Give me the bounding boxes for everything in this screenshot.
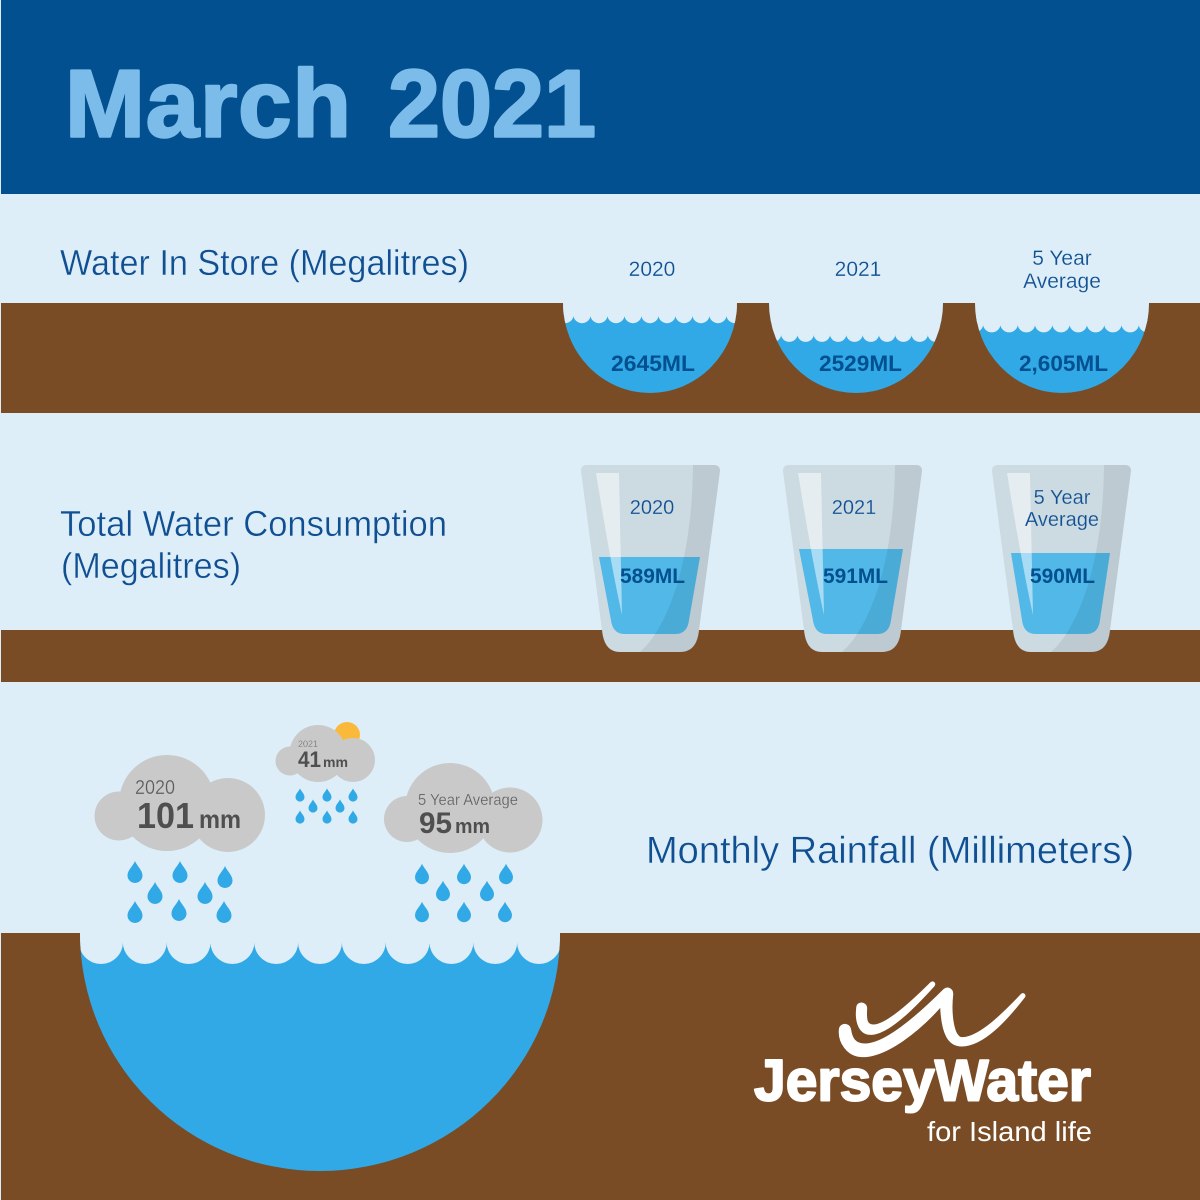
cloud 2021: 41 (298, 747, 321, 772)
heading: total water consumption: (Megalitres) (61, 545, 241, 586)
cloud 2020: 101 (137, 795, 194, 836)
panel: monthly rainfall (0, 722, 1200, 1200)
glass 2021 (783, 465, 922, 652)
rain drops 2021 (296, 788, 358, 824)
cloud 5 year average: 5 Year Average (418, 792, 518, 809)
cloud 2021 (276, 725, 375, 782)
cloud 2021: mm (323, 754, 348, 770)
page edge (0, 0, 1, 1200)
heading: water in store: Water In Store (Megalitres) (60, 242, 469, 283)
reservoir 2020 (556, 258, 744, 393)
reservoir 2021: 2021 (835, 258, 881, 281)
reservoir 2020: 2645ML (611, 351, 695, 376)
glass 5 year average (992, 465, 1131, 652)
glass 2021: 591ML (823, 565, 888, 588)
cloud 2020: mm (199, 806, 241, 834)
cloud 2020: 2020 (135, 777, 175, 799)
cloud 5 year average (384, 763, 542, 853)
glass 2021: 2021 (832, 497, 876, 519)
heading: monthly rainfall: Monthly Rainfall (Millimeters) (646, 830, 1134, 872)
icon: sun (334, 722, 360, 748)
glass 2020 (581, 465, 720, 652)
glass 5 year average: 590ML (1030, 565, 1095, 588)
tagline: for Island life (927, 1116, 1092, 1147)
logo: Jersey Water (754, 982, 1092, 1147)
reservoir 2021 (765, 258, 945, 393)
heading: total water consumption (60, 503, 447, 586)
shelf (0, 630, 1200, 682)
reservoir 5 year average: Average (1023, 270, 1101, 293)
glass 2020: 2020 (630, 497, 674, 519)
panel: total water consumption (0, 465, 1200, 682)
glass 2020: 589ML (620, 565, 685, 588)
large reservoir (78, 920, 562, 1171)
title (65, 50, 596, 158)
glass 5 year average: 5 Year (1034, 487, 1091, 509)
cloud 2021: 2021 (298, 739, 318, 750)
reservoir 5 year average (975, 250, 1149, 393)
reservoir 5 year average: 5 Year (1032, 247, 1092, 270)
header banner (0, 0, 1200, 194)
cloud 2020 (94, 755, 265, 852)
cloud 5 year average: 95 (419, 807, 452, 840)
cloud 5 year average: mm (455, 816, 490, 838)
rain drops 2020 (128, 861, 232, 923)
wordmark: JerseyWater (754, 1048, 1091, 1114)
ground strip (0, 303, 1200, 413)
title: March (65, 50, 351, 158)
title: 2021 (388, 50, 596, 158)
reservoir 2021: 2529ML (819, 351, 902, 376)
icon: waves (839, 982, 1025, 1057)
panel: water in store (0, 242, 1200, 413)
rain drops 5 year average (415, 864, 513, 922)
ground (0, 933, 1200, 1200)
heading: total water consumption: Total Water Consumption (60, 503, 447, 544)
reservoir 5 year average: 2,605ML (1019, 351, 1108, 376)
reservoir 2020: 2020 (629, 258, 675, 281)
glass 5 year average: Average (1025, 509, 1099, 531)
